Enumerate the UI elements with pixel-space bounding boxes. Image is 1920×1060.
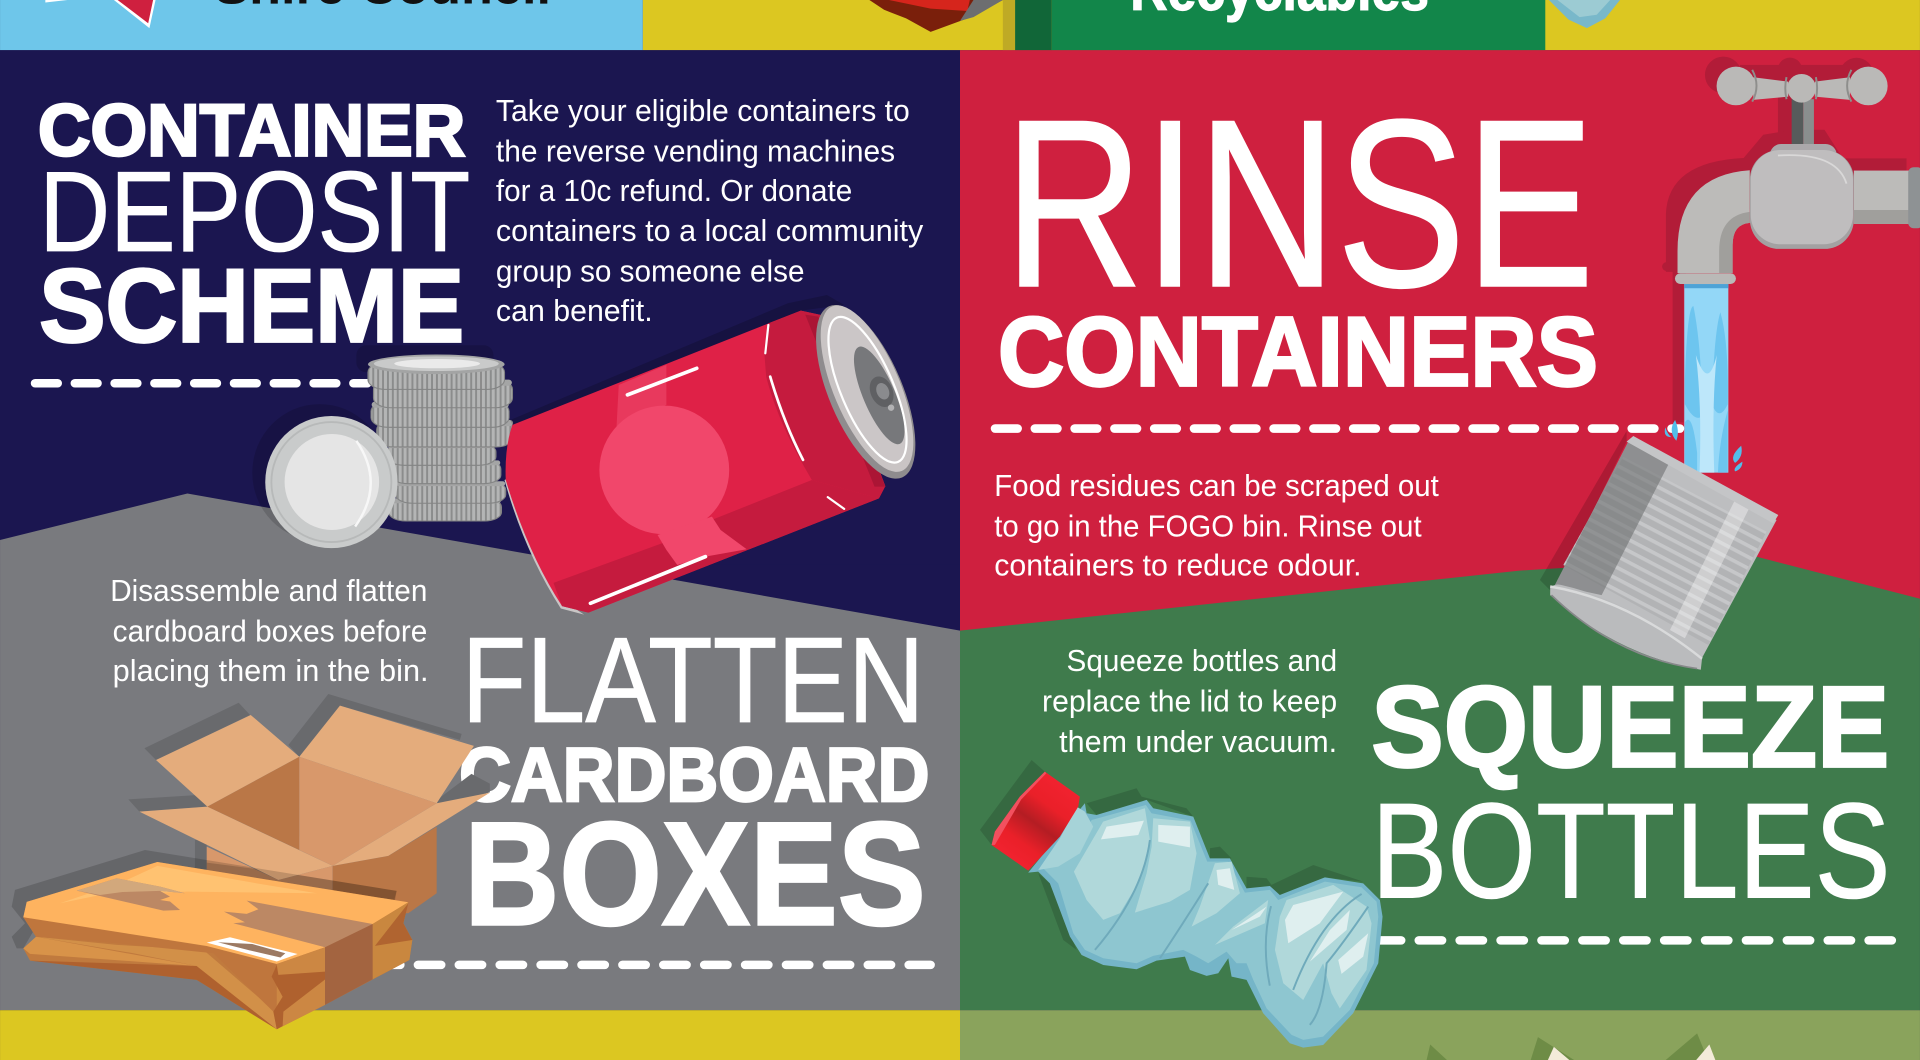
- top banner strip: [0, 0, 1920, 50]
- body text: them under vacuum.: [1059, 725, 1337, 759]
- heading: rinse containers: [998, 70, 1598, 407]
- recycling bin: [1003, 0, 1545, 50]
- icon: coin stack: [356, 345, 513, 521]
- heading: container deposit scheme: [38, 89, 470, 365]
- icon: tin can: [1540, 432, 1778, 670]
- icon: open cardboard box: [128, 694, 490, 913]
- panel: container deposit scheme: [35, 89, 936, 615]
- body text: [1042, 644, 1337, 759]
- heading: squeeze bottles: [1371, 664, 1891, 927]
- body text: Squeeze bottles and: [1067, 644, 1337, 678]
- heading: squeeze bottles: SQUEEZE: [1371, 664, 1889, 792]
- body text: [110, 574, 429, 688]
- icon: single coin: [252, 404, 397, 548]
- can lid: [796, 292, 936, 492]
- body text: Food residues can be scraped out: [994, 469, 1439, 503]
- heading: container deposit scheme: DEPOSIT: [39, 149, 470, 276]
- dashed divider: [995, 425, 1680, 432]
- body text: containers to a local community: [496, 214, 924, 248]
- body text: cardboard boxes before: [113, 615, 427, 649]
- body text: [496, 94, 924, 328]
- heading: flatten cardboard boxes: CARDBOARD: [459, 733, 929, 818]
- heading: container deposit scheme: SCHEME: [39, 249, 464, 365]
- icon: flattened cardboard box: [12, 850, 412, 1029]
- logo fragment: [45, 0, 156, 28]
- bottle cap: [992, 772, 1080, 871]
- heading: rinse containers: CONTAINERS: [998, 297, 1598, 407]
- icon: tap: [1662, 57, 1920, 422]
- body text: Disassemble and flatten: [110, 574, 427, 608]
- panel: rinse containers: [994, 57, 1920, 698]
- panel: squeeze bottles: [980, 644, 1892, 1048]
- body text: Take your eligible containers to: [496, 94, 910, 128]
- body text: for a 10c refund. Or donate: [496, 174, 852, 208]
- dashed divider: [1378, 937, 1892, 944]
- panel: flatten cardboard boxes: [12, 574, 931, 1029]
- dashed divider: [377, 961, 931, 968]
- grass fragment: [1427, 1033, 1715, 1060]
- dashed divider: [35, 380, 367, 387]
- body text: placing them in the bin.: [113, 654, 429, 688]
- body text: replace the lid to keep: [1042, 684, 1337, 718]
- body text: can benefit.: [496, 294, 653, 328]
- bottle fragment: [1549, 0, 1620, 28]
- heading: flatten cardboard boxes: FLATTEN: [462, 612, 924, 748]
- body text: the reverse vending machines: [496, 135, 895, 169]
- body text: [994, 469, 1439, 582]
- icon: crushed bottle: [980, 760, 1383, 1048]
- icon: drink can: [505, 292, 936, 615]
- shipping label: [207, 937, 298, 962]
- heading: rinse containers: RINSE: [1004, 70, 1594, 337]
- body text: containers to reduce odour.: [994, 548, 1362, 582]
- heading: container deposit scheme: CONTAINER: [38, 89, 465, 172]
- heading: flatten cardboard boxes: [459, 612, 929, 956]
- body text: to go in the FOGO bin. Rinse out: [994, 509, 1422, 543]
- heading: flatten cardboard boxes: BOXES: [464, 792, 926, 956]
- tap shadow: [1662, 57, 1906, 422]
- recyclable item fragment: [869, 0, 1003, 32]
- water droplets: [1665, 420, 1742, 471]
- icon: running water: [1665, 284, 1742, 473]
- body text: group so someone else: [496, 255, 804, 289]
